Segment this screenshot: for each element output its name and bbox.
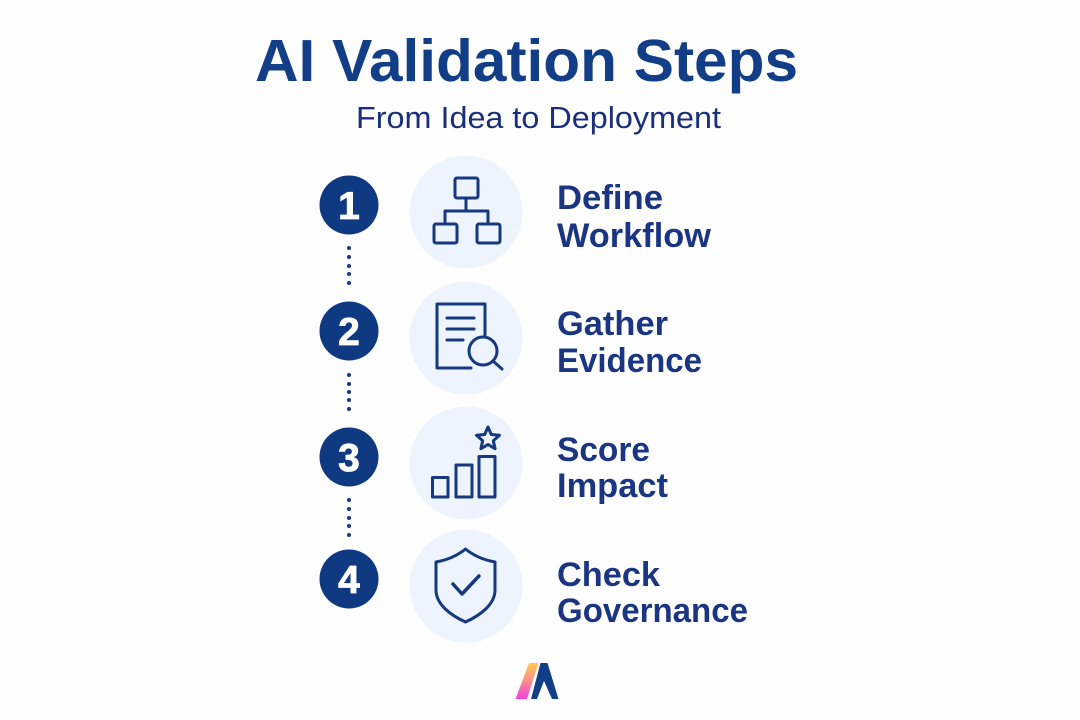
label: Score Impact: Impact	[557, 467, 668, 505]
step 4	[320, 530, 748, 642]
label: Define Workflow: Define	[557, 179, 663, 217]
icon: bars with star	[410, 406, 522, 520]
step 3	[320, 406, 668, 520]
dotted connector 2-3	[347, 373, 351, 411]
icon: shield with check	[410, 530, 522, 642]
logo	[516, 663, 558, 699]
label: Define Workflow	[557, 179, 712, 255]
subtitle: From Idea to Deployment	[356, 101, 722, 135]
label: Check Governance: Governance	[557, 592, 748, 630]
number badge 1: 1	[338, 185, 360, 228]
label: Score Impact	[557, 431, 668, 505]
label: Define Workflow: Workflow	[557, 217, 712, 255]
icon: workflow hierarchy	[410, 156, 522, 268]
label: Score Impact: Score	[557, 431, 650, 469]
label: Check Governance: Check	[557, 556, 660, 594]
label: Gather Evidence: Gather	[557, 305, 668, 343]
step 2	[320, 282, 702, 394]
number badge 3	[320, 428, 378, 486]
number badge 2: 2	[338, 311, 360, 354]
number badge 4	[320, 550, 378, 608]
label: Gather Evidence: Evidence	[557, 342, 702, 380]
icon: document with magnifier	[410, 282, 522, 394]
dotted connector 3-4	[347, 498, 351, 537]
number badge 4: 4	[338, 559, 360, 602]
number badge 2	[320, 302, 378, 360]
dotted connector 1-2	[347, 246, 351, 285]
title: AI Validation Steps	[255, 28, 798, 94]
label: Check Governance	[557, 556, 748, 630]
number badge 3: 3	[338, 437, 360, 480]
step 1	[320, 156, 712, 268]
label: Gather Evidence	[557, 305, 702, 380]
number badge 1	[320, 176, 378, 234]
